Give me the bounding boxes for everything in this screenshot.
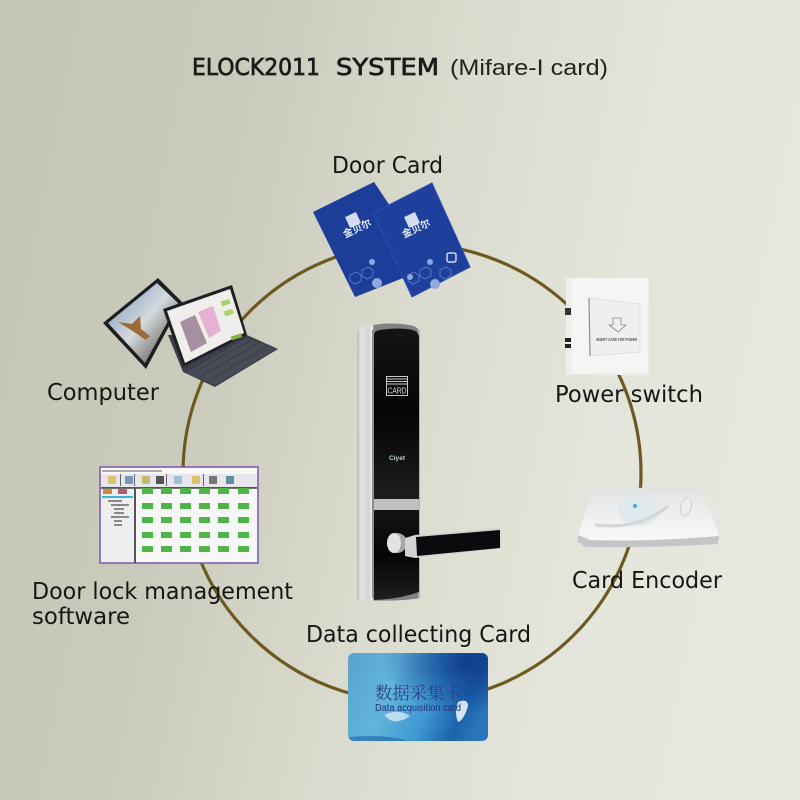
- lock card reader mark: CARD: [388, 386, 407, 396]
- icon: power switch: INSERT CARD FOR POWER: [596, 337, 638, 342]
- label: Data collecting Card: Data collecting Card: [306, 622, 531, 648]
- title: ELOCK2011: [192, 55, 320, 81]
- label: Door lock management software: [32, 579, 293, 630]
- software door status grid: [142, 488, 249, 552]
- icon: data collecting card: Data acquisition card: [375, 703, 461, 714]
- label: Door lock management software: software: [32, 604, 130, 630]
- icon: card encoder: [578, 487, 719, 547]
- title: (Mifare-I card): [450, 55, 608, 80]
- label: Door Card: Door Card: [332, 153, 443, 179]
- icon: management software window: [100, 467, 258, 563]
- connecting ring: [183, 244, 641, 702]
- label: Card Encoder: Card Encoder: [572, 568, 723, 594]
- icon: computer tablets: [103, 278, 278, 387]
- icon: door cards: 金贝尔: [341, 216, 373, 241]
- icon: door lock: [357, 324, 501, 601]
- icon: data collecting card: 数据采集卡: [375, 679, 462, 704]
- title: SYSTEM: [336, 55, 439, 81]
- label: Power switch: Power switch: [555, 382, 703, 408]
- lock handle: [387, 528, 501, 558]
- icon: door cards: 金贝尔: [400, 216, 432, 241]
- lock card reader mark: [386, 376, 408, 396]
- icon: door cards: [313, 182, 470, 297]
- title: [192, 55, 608, 81]
- lock brand mark: Ciyet: [389, 455, 406, 462]
- icon: power switch: [565, 278, 649, 375]
- label: Door lock management software: Door lock management: [32, 579, 293, 605]
- icon: data collecting card: [348, 653, 488, 741]
- label: Computer: Computer: [47, 380, 160, 406]
